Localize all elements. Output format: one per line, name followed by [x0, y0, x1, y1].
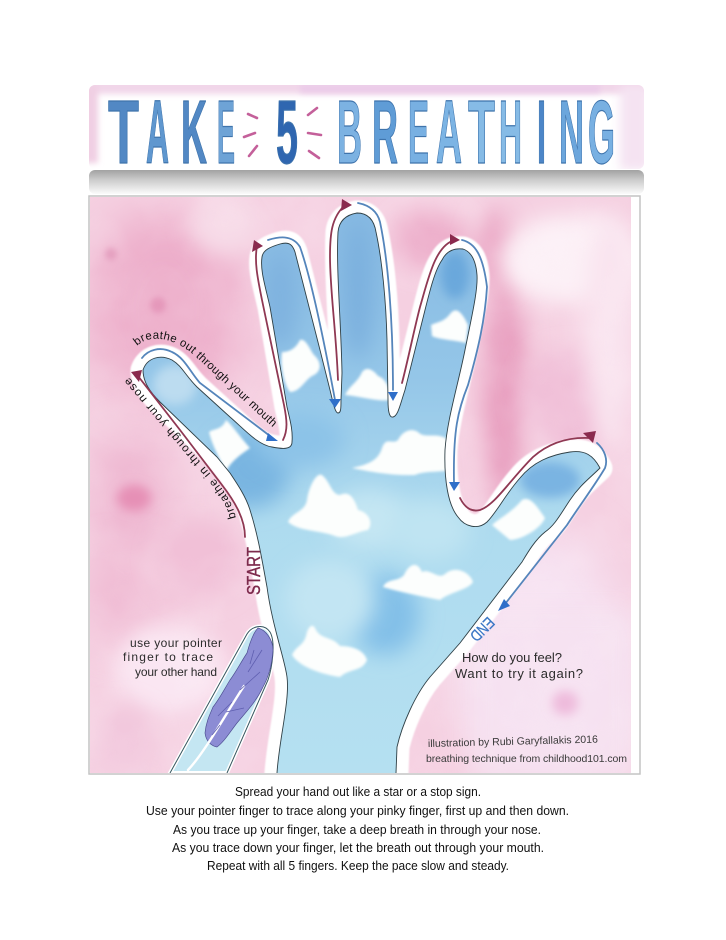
banner reflection [89, 170, 644, 194]
breathing-out arrows (blue) [142, 203, 606, 604]
label: breathe in through your nose [128, 376, 236, 518]
instructions text: Spread your hand out like a star or a stop sign. [235, 785, 481, 799]
title text: TAKE 5 BREATHING: B [337, 83, 362, 183]
breathing-out arrowheads [266, 392, 510, 611]
cloud: middle finger base [345, 369, 392, 400]
title text: TAKE 5 BREATHING: E [408, 83, 429, 183]
label: END: END [466, 613, 497, 644]
note: how do you feel [455, 652, 582, 680]
watercolour background [85, 195, 641, 780]
illustration panel: breathe out through your mouth [132, 331, 276, 427]
illustration panel: breathe in through your nose [126, 378, 236, 520]
note: how do you feel: Want to try it again? [455, 666, 583, 681]
illustration credit: illustration by Rubi Garyfallakis 2016 [428, 734, 598, 750]
cloud: pinky base [209, 420, 250, 472]
cloud: palm lower left [292, 626, 367, 677]
clouds [209, 310, 545, 677]
title text: TAKE 5 BREATHING: A [436, 83, 462, 183]
title text: TAKE 5 BREATHING: T [108, 83, 139, 183]
cloud: ring finger base [281, 340, 320, 392]
breathing-in arrowheads [131, 199, 596, 443]
note: use your pointer finger: your other hand [135, 665, 217, 679]
illustration credit [426, 734, 627, 765]
cloud: palm large [288, 475, 370, 537]
hand fill with clouds [130, 205, 610, 775]
title text: TAKE 5 BREATHING [108, 83, 615, 183]
title text: TAKE 5 BREATHING: K [181, 83, 207, 183]
title text: TAKE 5 BREATHING: I [537, 83, 546, 183]
instructions text: As you trace up your finger, take a deep breath in through your nose. [173, 823, 541, 837]
title text: TAKE 5 BREATHING: R [372, 83, 398, 183]
title text: TAKE 5 BREATHING: A [146, 83, 169, 183]
instructions text: As you trace down your finger, let the breath out through your mouth. [172, 841, 544, 855]
instructions text [146, 785, 569, 873]
cloud: thumb [492, 499, 545, 540]
illustration credit: breathing technique from childhood101.com [426, 753, 627, 765]
note: use your pointer finger: use your pointer [130, 636, 222, 650]
note: how do you feel: How do you feel? [462, 650, 562, 665]
title text: TAKE 5 BREATHING: 5 [276, 83, 298, 183]
cloud: index finger [431, 310, 468, 343]
title text: TAKE 5 BREATHING: T [468, 83, 495, 183]
feather [205, 628, 273, 747]
note: use your pointer finger: finger to trace [123, 650, 213, 664]
title text: TAKE 5 BREATHING: N [559, 83, 584, 183]
label: START: START [244, 547, 264, 595]
title rays around the 5 [244, 108, 321, 158]
instructions text: Repeat with all 5 fingers. Keep the pace slow and steady. [207, 859, 509, 873]
tracing finger with feather [170, 626, 273, 773]
label: breathe out through your mouth [137, 339, 278, 432]
note: use your pointer finger [123, 636, 222, 679]
cloud: palm long [352, 430, 463, 475]
title banner: G [588, 83, 615, 183]
title text: TAKE 5 BREATHING: E [217, 83, 235, 183]
illustration panel [88, 195, 641, 775]
title banner [89, 85, 644, 169]
cloud: palm lower right [383, 565, 473, 600]
hand outline [143, 213, 600, 773]
title text: TAKE 5 BREATHING: H [499, 83, 522, 183]
hand halo [143, 213, 600, 773]
instructions text: Use your pointer finger to trace along your pinky finger, first up and then down. [146, 804, 569, 818]
breathing-in arrows (red) [138, 205, 590, 537]
right paper edge [631, 197, 632, 773]
